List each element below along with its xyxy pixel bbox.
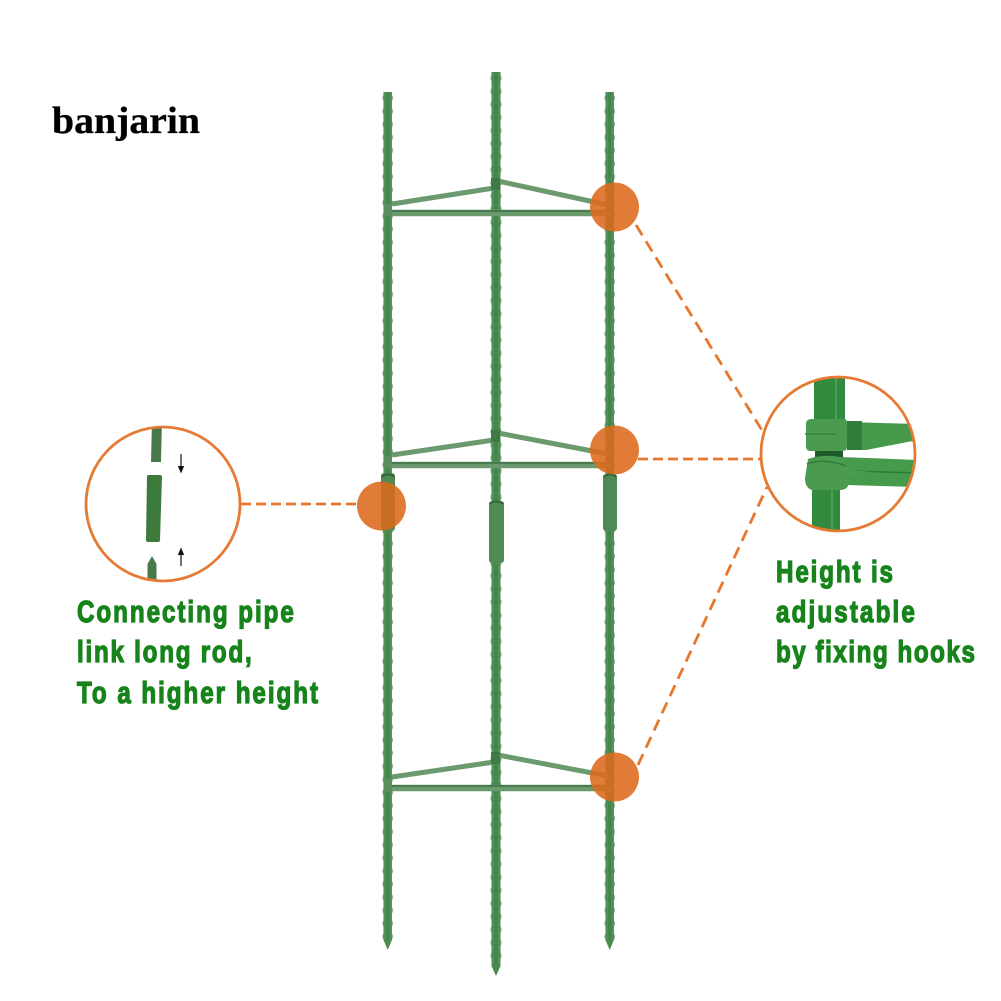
- center rod: [492, 72, 500, 976]
- caption: connecting pipe: link long rod,: [77, 634, 252, 669]
- left rod: [384, 92, 392, 950]
- plant support trellis: [381, 72, 617, 976]
- upper rod piece: [151, 428, 162, 462]
- caption: adjustable height: adjustable: [776, 594, 915, 629]
- caption: connecting pipe: To a higher height: [77, 675, 318, 710]
- detail circle: fixing hook: [761, 370, 918, 540]
- dashed connector lines: [241, 225, 767, 765]
- connecting pipe piece: [146, 475, 162, 542]
- center connecting sleeve: [489, 501, 504, 563]
- left connecting sleeve: [381, 473, 395, 531]
- right rod: [606, 92, 614, 950]
- caption: adjustable height: [776, 554, 975, 669]
- orange marker: connecting pipe: [357, 482, 406, 530]
- caption: connecting pipe: Connecting pipe: [77, 594, 294, 629]
- lower clip: [805, 456, 872, 490]
- orange marker: middle hook: [590, 426, 639, 474]
- bottom support ring: [384, 752, 612, 791]
- caption: connecting pipe: [77, 594, 318, 710]
- middle support ring: [384, 430, 612, 468]
- orange marker: bottom hook: [590, 752, 639, 802]
- down arrow: [178, 454, 184, 472]
- lower arm: [840, 457, 918, 487]
- upper arm: [846, 422, 918, 450]
- orange marker: top hook: [590, 182, 639, 232]
- up arrow: [178, 549, 184, 566]
- vertical rod: [812, 378, 845, 530]
- lower rod piece: [148, 556, 156, 580]
- brand title: banjarin: [52, 100, 200, 142]
- right connecting sleeve: [603, 474, 617, 531]
- caption: adjustable height: by fixing hooks: [776, 634, 975, 669]
- detail circle: connecting pipe: [86, 420, 240, 590]
- upper clip: [806, 419, 847, 451]
- top support ring: [384, 178, 612, 216]
- caption: adjustable height: Height is: [776, 554, 893, 589]
